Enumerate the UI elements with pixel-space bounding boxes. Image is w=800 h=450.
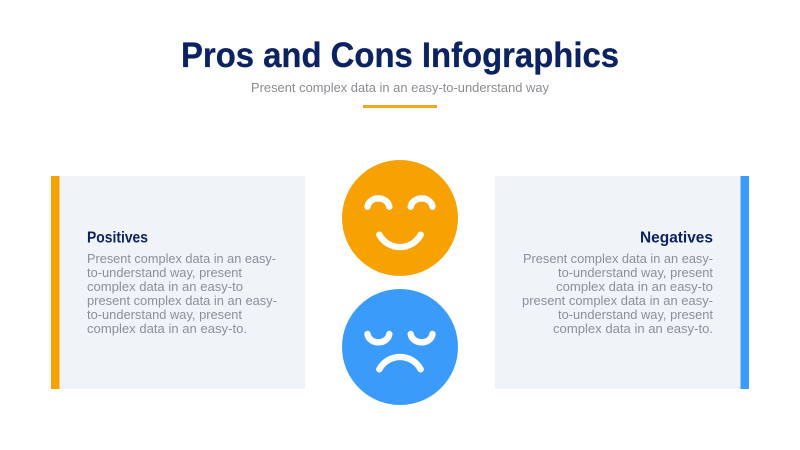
icon: sad face	[342, 289, 458, 405]
text block: positives: to-understand way, present	[87, 265, 242, 280]
title: Pros and Cons Infographics	[181, 36, 619, 75]
heading: negatives: Negatives	[640, 230, 713, 246]
text block: positives	[87, 251, 277, 336]
panel background	[495, 176, 749, 389]
text block: negatives	[522, 251, 713, 336]
panel: positives	[51, 176, 305, 389]
text block: positives: present complex data in an easy-	[87, 293, 277, 308]
icon: smiling face	[342, 160, 458, 276]
text block: positives: Present complex data in an easy-	[87, 251, 276, 266]
title underline	[363, 105, 437, 108]
accent bar: orange	[51, 176, 60, 389]
accent bar: blue	[740, 176, 749, 389]
subtitle: Present complex data in an easy-to-understand way	[251, 80, 549, 95]
text block: positives: to-understand way, present	[87, 307, 242, 322]
text block: negatives: to-understand way, present	[558, 307, 713, 322]
text block: positives: complex data in an easy-to.	[87, 321, 247, 336]
text block: negatives: present complex data in an easy-	[522, 293, 713, 308]
text block: negatives: to-understand way, present	[558, 265, 713, 280]
text block: negatives: complex data in an easy-to	[556, 279, 713, 294]
text block: positives: complex data in an easy-to	[87, 279, 243, 294]
panel background	[51, 176, 305, 389]
heading: positives: Positives	[87, 230, 148, 246]
text block: negatives: Present complex data in an easy-	[523, 251, 713, 266]
text block: negatives: complex data in an easy-to.	[553, 321, 713, 336]
panel: negatives	[495, 176, 749, 389]
